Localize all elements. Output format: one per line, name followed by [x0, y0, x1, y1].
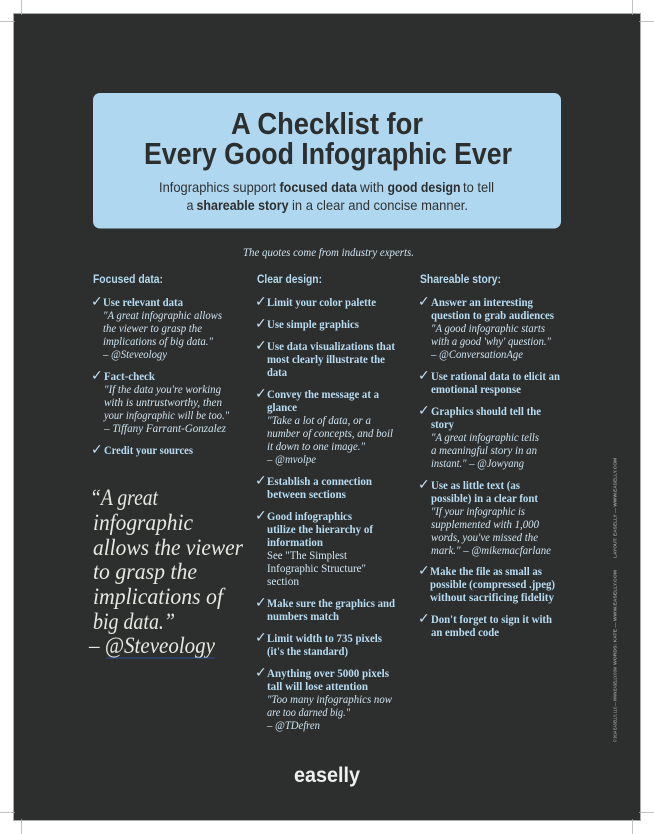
title	[144, 106, 512, 171]
item: hierarchy of information: utilize the hierarchy of	[267, 522, 374, 536]
item: convey the message: "Take a lot of data, or a	[267, 413, 371, 427]
item: answer a question: – @ConversationAge	[430, 347, 524, 361]
vertical credits: LAYOUT: EASELLY — WWW.EASELLY.COM	[612, 458, 618, 558]
column: clear design	[255, 272, 395, 732]
intro text: shareable story	[196, 197, 289, 213]
item: limit width: (it's the standard)	[267, 644, 348, 658]
intro text: good design	[388, 179, 460, 195]
pull quote: “A great	[90, 485, 159, 510]
item: data visualizations: Use data visualizations that	[267, 339, 395, 353]
intro text: Infographics support	[159, 179, 276, 195]
item: hierarchy of information: Infographic Structure"	[267, 561, 366, 575]
item: rational data: emotional response	[431, 382, 522, 396]
intro text: to tell	[463, 179, 494, 195]
title: A Checklist for	[231, 106, 423, 141]
item: small file size: Make the file as small as	[430, 564, 542, 578]
item: limit width	[255, 630, 382, 658]
item: graphics tell the story: ✓	[418, 403, 430, 419]
header panel	[93, 93, 561, 228]
item: limit width: ✓	[255, 630, 267, 646]
item: little text, clear font: possible) in a clear font	[431, 491, 538, 505]
pull quote: – @Steveology	[88, 633, 216, 658]
item: use relevant data: Use relevant data	[103, 295, 183, 309]
item: convey the message: ✓	[255, 386, 267, 402]
intro text: a	[186, 197, 194, 213]
item: little text, clear font: words, you've missed the	[431, 530, 539, 544]
item: data visualizations: ✓	[255, 338, 267, 354]
heading: focused data: Focused data:	[93, 272, 163, 286]
item: small file size: ✓	[418, 563, 430, 579]
item: convey the message: Convey the message at a	[267, 387, 379, 401]
item: graphics and numbers match	[255, 595, 395, 623]
vertical credits: © 2014 EASELLY, LLC — WWW.EASELLY.COM	[612, 667, 618, 742]
easelly logo: easelly	[294, 764, 360, 787]
item: graphics tell the story: Graphics should tell the	[431, 404, 542, 418]
item: credit your sources	[91, 442, 193, 458]
item: small file size	[418, 563, 555, 604]
item: over 5000 pixels tall: Anything over 5000 pixels	[267, 666, 389, 680]
item: over 5000 pixels tall: – @TDefren	[266, 718, 320, 732]
item: credit your sources: ✓	[91, 442, 103, 458]
pull quote	[88, 485, 244, 658]
item: answer a question: with a good 'why' question."	[431, 334, 552, 348]
item: data visualizations: most clearly illustrate the	[267, 352, 386, 366]
item: graphics tell the story: a meaningful story in an	[431, 443, 537, 457]
intro text: with	[359, 179, 384, 195]
item: establish a connection: between sections	[267, 487, 346, 501]
item: use relevant data: "A great infographic allows	[103, 308, 222, 322]
item: small file size: without sacrificing fidelity	[430, 590, 554, 604]
item: over 5000 pixels tall: are too darned big."	[267, 705, 351, 719]
title: Every Good Infographic Ever	[144, 136, 512, 171]
item: limit color palette: ✓	[255, 294, 267, 310]
item: graphics and numbers match: numbers match	[267, 609, 339, 623]
item: over 5000 pixels tall: tall will lose attention	[267, 679, 368, 693]
intro text: in a clear and concise manner.	[292, 197, 468, 213]
item: graphics tell the story: story	[431, 417, 454, 431]
item: hierarchy of information: ✓	[255, 508, 267, 524]
pull quote: infographic	[93, 510, 193, 535]
item: establish a connection	[255, 473, 372, 501]
item: little text, clear font: "If your infographic is	[431, 504, 525, 518]
item: use relevant data	[91, 294, 222, 361]
item: graphics tell the story: "A great infographic tells	[431, 430, 539, 444]
heading: shareable story: Shareable story:	[420, 272, 501, 286]
item: answer a question	[418, 294, 554, 361]
pull quote: big data.”	[93, 609, 175, 634]
item: use relevant data: ✓	[91, 294, 103, 310]
vertical credits	[612, 458, 618, 742]
item: little text, clear font: Use as little text (as	[431, 478, 520, 492]
item: over 5000 pixels tall: "Too many infographics now	[267, 692, 392, 706]
column: focused data	[91, 272, 230, 458]
item: fact-check	[91, 368, 230, 435]
item: use relevant data: implications of big data."	[103, 334, 214, 348]
item: use simple graphics: ✓	[255, 316, 267, 332]
item: graphics tell the story	[418, 403, 542, 470]
item: embed code: an embed code	[431, 625, 500, 639]
item: convey the message: number of concepts, and boil	[267, 426, 394, 440]
item: credit your sources: Credit your sources	[104, 443, 193, 457]
panel background	[93, 93, 561, 228]
pull quote: to grasp the	[93, 559, 197, 584]
pull quote: implications of	[93, 584, 226, 609]
item: establish a connection: Establish a connection	[267, 474, 372, 488]
item: embed code: ✓	[418, 611, 430, 627]
item: limit width: Limit width to 735 pixels	[267, 631, 382, 645]
item: fact-check: with is untrustworthy, then	[104, 395, 222, 409]
item: rational data: Use rational data to elicit an	[431, 369, 560, 383]
item: use relevant data: – @Steveology	[102, 347, 168, 361]
item: over 5000 pixels tall: ✓	[255, 665, 267, 681]
item: answer a question: ✓	[418, 294, 430, 310]
item: hierarchy of information: See "The Simplest	[267, 548, 348, 562]
item: answer a question: question to grab audiences	[431, 308, 554, 322]
item: small file size: possible (compressed .jpeg)	[430, 577, 555, 591]
item: rational data	[418, 368, 560, 396]
item: use simple graphics: Use simple graphics	[267, 317, 359, 331]
item: hierarchy of information	[255, 508, 374, 588]
item: graphics and numbers match: ✓	[255, 595, 267, 611]
item: little text, clear font: ✓	[418, 477, 430, 493]
item: little text, clear font: mark." – @mikemacfarlane	[431, 543, 552, 557]
pull quote: allows the viewer	[93, 535, 244, 560]
item: hierarchy of information: information	[267, 535, 323, 549]
item: use relevant data: the viewer to grasp the	[103, 321, 203, 335]
item: establish a connection: ✓	[255, 473, 267, 489]
item: limit color palette: Limit your color palette	[267, 295, 377, 309]
item: hierarchy of information: section	[267, 574, 299, 588]
item: little text, clear font	[418, 477, 552, 557]
item: embed code	[418, 611, 552, 639]
item: answer a question: "A good infographic starts	[431, 321, 545, 335]
item: over 5000 pixels tall	[255, 665, 392, 732]
vertical credits: WORDS: KATE — WWW.EASELLY.COM	[612, 570, 618, 665]
item: convey the message: – @mvolpe	[266, 452, 317, 466]
column: shareable story	[418, 272, 560, 639]
item: convey the message: glance	[267, 400, 298, 414]
item: convey the message: it down to one image."	[267, 439, 366, 453]
item: little text, clear font: supplemented with 1,000	[431, 517, 539, 531]
item: graphics and numbers match: Make sure the graphics and	[267, 596, 395, 610]
item: convey the message	[255, 386, 394, 466]
item: embed code: Don't forget to sign it with	[431, 612, 552, 626]
item: hierarchy of information: Good infographics	[267, 509, 352, 523]
item: answer a question: Answer an interesting	[431, 295, 533, 309]
item: data visualizations	[255, 338, 395, 379]
item: fact-check: "If the data you're working	[104, 382, 221, 396]
item: fact-check: – Tiffany Farrant-Gonzalez	[103, 421, 226, 435]
item: graphics tell the story: instant." – @Jowyang	[431, 456, 524, 470]
intro text	[159, 179, 494, 213]
quotes note: The quotes come from industry experts.	[243, 245, 414, 259]
item: fact-check: ✓	[91, 368, 103, 384]
item: fact-check: Fact-check	[104, 369, 155, 383]
item: data visualizations: data	[267, 365, 287, 379]
item: rational data: ✓	[418, 368, 430, 384]
heading: clear design: Clear design:	[257, 272, 322, 286]
item: fact-check: your infographic will be too."	[103, 408, 230, 422]
intro text: focused data	[280, 179, 357, 195]
